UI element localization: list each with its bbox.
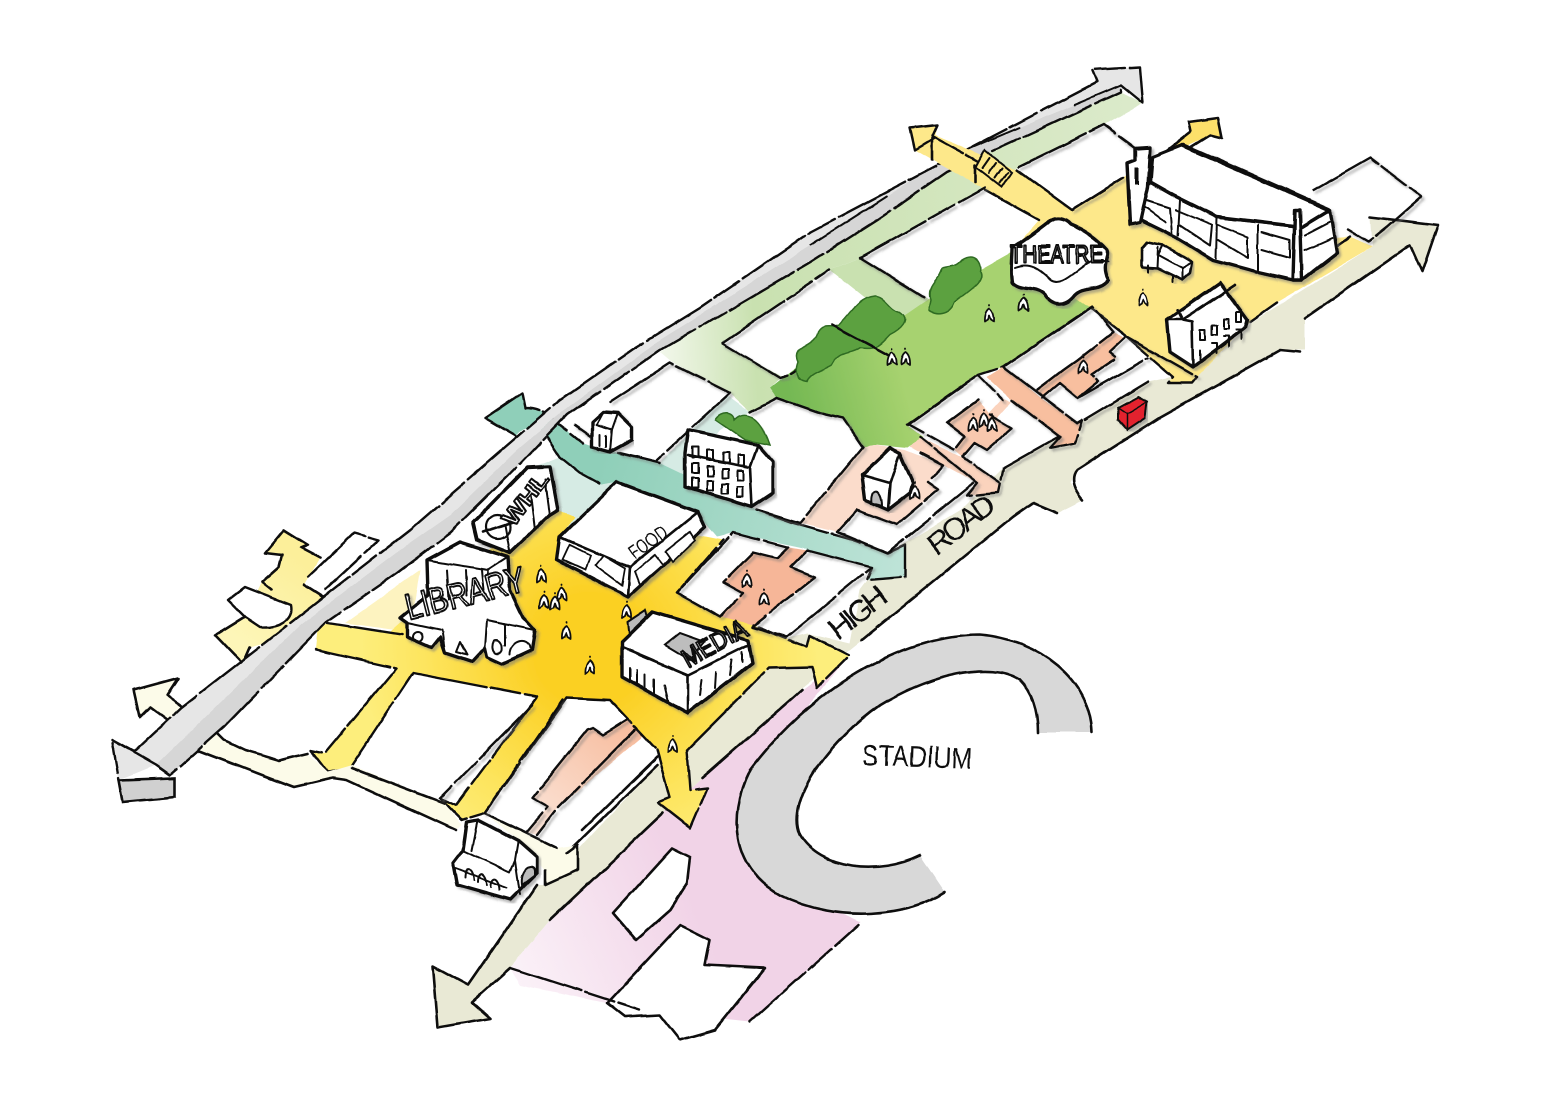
ROAD road lettering: ROAD [920,486,1003,562]
tree by theatre [928,257,981,314]
salmon band to High Road, east [987,367,1082,448]
rail viaduct [112,67,1143,802]
viaduct end block [119,778,175,802]
terrace building [685,430,773,507]
salmon branch north east [1037,332,1125,398]
block beside rail [308,533,379,590]
teal green link [485,393,905,580]
cross green lane [830,258,930,322]
roundel [486,515,510,539]
theatre label: THEATRE [1010,239,1103,269]
stand pier [1293,210,1302,280]
stadium ring [737,635,1092,914]
salmon blob south of teal [720,547,815,627]
salmon plaza centre [947,400,1012,457]
food label: FOOD [625,522,672,564]
central yellow plaza with arrows [311,510,850,828]
chapel house [862,448,913,510]
theatre sign [1010,218,1108,304]
delivery van [1142,242,1192,282]
stadium plaza block one [613,848,690,940]
tree cluster by buildings [796,296,905,382]
salmon band to High Road, west [910,437,1003,495]
tree behind terrace [716,413,770,445]
pale teal link near terrace [660,395,750,475]
east town houses [1167,283,1247,367]
stadium label: STADIUM [862,739,973,776]
cream arrow west [134,678,188,722]
road: High Road [433,217,1438,1027]
north east yellow arrow [1155,118,1222,168]
green corridor, light [660,92,1143,412]
theatre tower [1127,147,1150,225]
central green park [770,253,1092,448]
salmon lane to Food block [800,445,943,532]
cream arrow by church [485,813,578,885]
pale teal link near station [527,457,618,537]
theatre stand building [1127,145,1337,280]
parcel outlines [440,125,1421,835]
panel: stadium forecourt pink zone [510,655,860,1040]
footbridge arrow and yellow theatre square [910,125,1372,383]
pale yellow link [345,570,420,632]
west stepped yellow arrow [216,530,323,663]
WHL text: WHL [497,467,554,530]
stadium plaza block two [607,925,765,1040]
footbridge ladder [976,150,1012,187]
HIGH road lettering: HIGH [821,578,894,647]
salmon lane south of plaza [527,720,650,835]
media label: MEDIA [676,613,753,673]
trees [716,257,981,445]
red bus [1118,397,1147,430]
food building [557,482,705,597]
pale cream path south west [194,730,462,830]
media building [622,610,753,713]
salmon link [955,398,1012,457]
small block west of rail [228,587,291,627]
whole drawing [112,67,1438,1040]
library building [400,542,535,664]
GWHL station sign [473,467,558,553]
church south west [453,820,537,900]
pedestrians [536,290,1148,753]
library label: LIBRARY [401,558,529,628]
tree trunk line [832,325,888,355]
small house north [592,412,632,452]
